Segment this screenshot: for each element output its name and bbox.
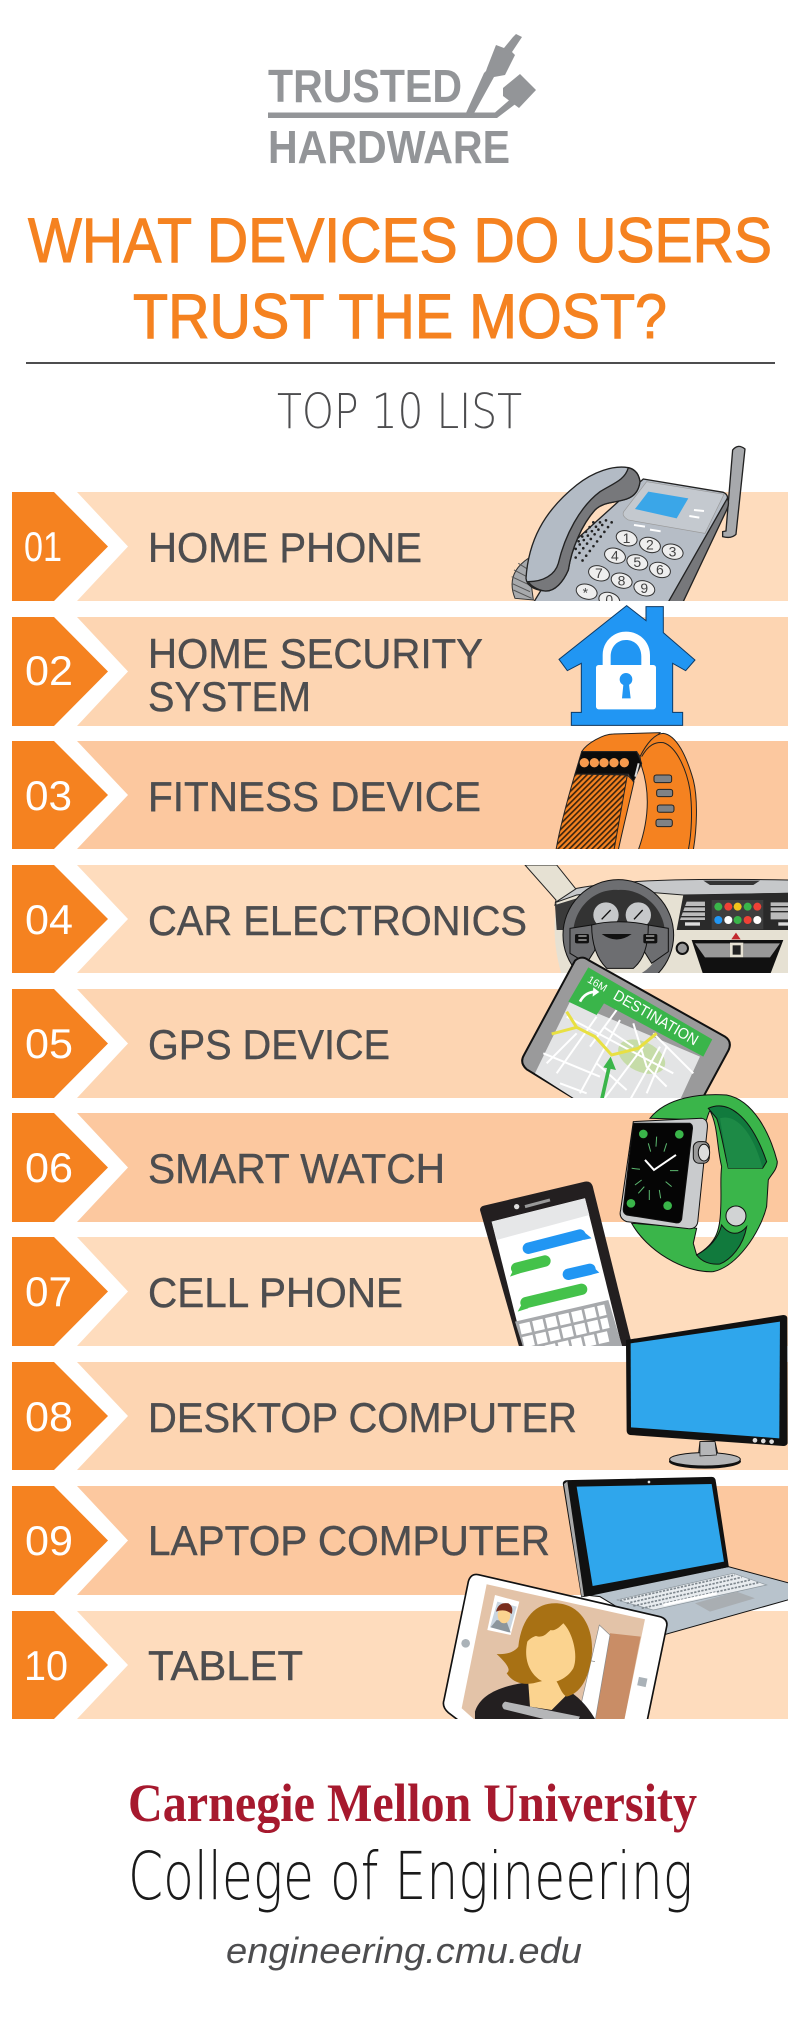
panel: row 06 — [12, 1113, 788, 1222]
icon: home phone: 0 — [605, 592, 613, 608]
panel: row 02 — [12, 617, 788, 726]
icon: cell phone — [480, 1181, 633, 1361]
panel: row 07 — [12, 1237, 788, 1346]
panel: row 10: 10 — [24, 1642, 68, 1689]
icon: tablet — [443, 1574, 667, 1727]
panel: row 04: 04 — [25, 896, 73, 943]
panel: row 06: 06 — [25, 1144, 73, 1191]
panel: row 08 — [12, 1362, 788, 1470]
padlock — [596, 632, 656, 709]
footer: Carnegie Mellon University: Carnegie Mellon University — [128, 1773, 697, 1833]
panel: row 01: HOME PHONE — [148, 524, 422, 571]
logo word: hardware: HARDWARE — [268, 121, 510, 173]
logo plug one — [466, 34, 522, 115]
icon: gps device: 16M — [585, 974, 609, 995]
panel: row 06: SMART WATCH — [148, 1145, 445, 1192]
panel: row 05 — [12, 989, 788, 1098]
icon: smart watch — [620, 1095, 777, 1272]
logo plug two — [503, 74, 536, 108]
panel: row 10: TABLET — [148, 1642, 303, 1689]
icon: fitness band — [556, 733, 696, 850]
title: TRUST THE MOST? — [133, 282, 667, 352]
panel: row 10 — [12, 1611, 788, 1719]
panel: row 05: 05 — [25, 1020, 73, 1067]
logo word: trusted: TRUSTED — [268, 60, 462, 112]
panel: row 04 — [12, 865, 788, 973]
panel: row 02: SYSTEM — [148, 673, 311, 720]
panel: row 01 — [12, 492, 788, 601]
icon: home phone: 6 — [656, 562, 664, 578]
icon: home phone: * — [583, 585, 589, 601]
icon: home phone: 1 — [623, 530, 631, 546]
icon: laptop computer — [563, 1477, 790, 1635]
subtitle: TOP 10 LIST — [277, 384, 522, 440]
house shape — [559, 606, 695, 725]
icon: home phone: 9 — [640, 580, 648, 596]
panel: row 04: CAR ELECTRONICS — [148, 897, 527, 944]
icon: home phone: 4 — [611, 547, 619, 563]
logo underline cable — [268, 84, 534, 118]
icon: desktop monitor — [626, 1315, 788, 1469]
title — [28, 206, 772, 352]
panel: row 07: 07 — [25, 1268, 72, 1315]
icon: home phone: 8 — [618, 572, 626, 588]
icon: home phone: 7 — [595, 565, 603, 581]
footer: website: engineering.cmu.edu — [226, 1930, 582, 1971]
panel: row 09 — [12, 1486, 788, 1595]
panel: row 08: DESKTOP COMPUTER — [148, 1394, 577, 1441]
icon: home phone: 2 — [646, 537, 654, 553]
panel: row 09: 09 — [25, 1517, 73, 1564]
icon: gps device — [522, 958, 730, 1100]
icon: home phone: 3 — [669, 543, 677, 559]
icon: home phone: 5 — [633, 554, 641, 570]
panel: row 03 — [12, 741, 788, 849]
panel: row 09: LAPTOP COMPUTER — [148, 1517, 550, 1564]
panel: row 03: FITNESS DEVICE — [148, 773, 481, 820]
icon: home phone — [512, 446, 745, 610]
panel: row 03: 03 — [25, 772, 72, 819]
panel: row 08: 08 — [25, 1393, 73, 1440]
panel: row 01: 01 — [24, 523, 62, 570]
icon: car dashboard — [524, 865, 788, 973]
icon: home security house — [559, 606, 695, 725]
panel: row 07: CELL PHONE — [148, 1269, 403, 1316]
logo: Trusted Hardware — [268, 34, 536, 173]
panel: row 05: GPS DEVICE — [148, 1021, 390, 1068]
panel: row 02: 02 — [25, 647, 73, 694]
panel: row 02: HOME SECURITY — [148, 630, 483, 677]
icon: gps device: DESTINATION — [610, 987, 701, 1049]
